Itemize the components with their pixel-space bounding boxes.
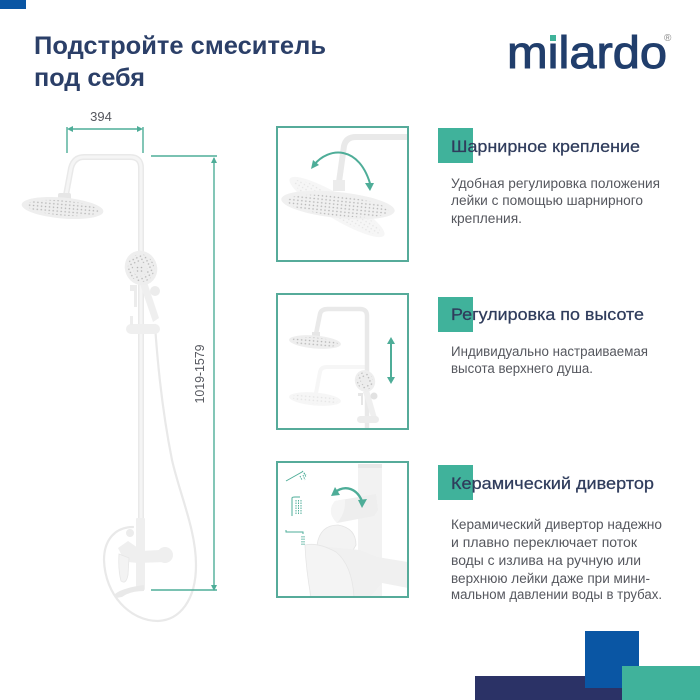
ghost lowered shower — [316, 367, 366, 393]
dimension: 1019-1579: 1019-1579 — [192, 344, 207, 404]
riser pipe with overhead arm — [66, 157, 141, 520]
title — [34, 32, 326, 92]
panel: hinged mount image — [277, 127, 408, 261]
heading and text: ceramic diverter: Керамический дивертор надежно — [451, 517, 662, 532]
heading and text: hinged mount: лейки с помощью шарнирного — [451, 193, 643, 208]
logo: milardo: milardo — [507, 27, 667, 78]
heading and text: height adjustment: высота верхнего душа. — [451, 361, 593, 376]
dimension: 394 — [67, 109, 143, 153]
diverter arrow — [331, 487, 367, 508]
logo: milardo: ® — [664, 33, 672, 44]
heading and text: ceramic diverter: верхнюю лейки даже при мини- — [451, 571, 650, 586]
dimension: 1019-1579 — [151, 156, 217, 591]
heading and text: ceramic diverter: мальном давлении воды в трубах. — [451, 587, 662, 602]
heading and text: hinged mount: Шарнирное крепление — [451, 137, 640, 156]
hand shower — [119, 245, 163, 322]
riser — [316, 309, 367, 430]
ghost head positions — [290, 177, 384, 237]
raised shower head — [312, 332, 320, 336]
heading and text: hinged mount: крепления. — [451, 211, 522, 226]
mixer lever — [305, 544, 354, 597]
rotation arrow — [311, 153, 374, 191]
mixer body and spout — [310, 550, 407, 596]
heading and text: hinged mount — [438, 128, 660, 226]
overhead shower head — [21, 193, 104, 222]
heading and text: ceramic diverter: Керамический дивертор — [451, 474, 654, 493]
panel: height adjustment image — [277, 294, 408, 430]
panel: ceramic diverter image — [277, 462, 408, 598]
main pipe — [358, 464, 382, 598]
product drawing: shower system — [21, 157, 196, 621]
mixer back plate — [317, 525, 356, 552]
holder — [357, 416, 379, 423]
heading and text: height adjustment — [438, 297, 648, 376]
heading and text: height adjustment: Индивидуально настраиваемая — [451, 344, 648, 359]
mixer with spout — [115, 529, 173, 598]
dimension: 394: 394 — [90, 109, 112, 124]
lower pipe — [136, 518, 145, 590]
heading and text: ceramic diverter: и плавно переключает поток — [451, 535, 637, 550]
hose — [104, 325, 196, 621]
icon: hand shower — [292, 497, 301, 516]
hand shower — [363, 392, 376, 416]
heading and text: height adjustment: Регулировка по высоте — [451, 305, 644, 324]
arm — [339, 137, 408, 182]
icon: overhead shower — [286, 471, 306, 481]
height arrow — [387, 337, 395, 384]
heading and text: ceramic diverter: воды с излива на ручную или — [451, 553, 641, 568]
decorative corner square — [0, 0, 26, 9]
sliding holder — [126, 285, 160, 334]
title: под себя — [34, 64, 145, 92]
icon: spout — [286, 530, 304, 546]
diverter knob — [337, 497, 358, 523]
heading and text: ceramic diverter — [438, 465, 662, 602]
title: Подстройте смеситель — [34, 32, 326, 60]
decorative colour blocks — [475, 631, 700, 700]
heading and text: hinged mount: Удобная регулировка положения — [451, 176, 660, 191]
shower head — [282, 191, 394, 219]
